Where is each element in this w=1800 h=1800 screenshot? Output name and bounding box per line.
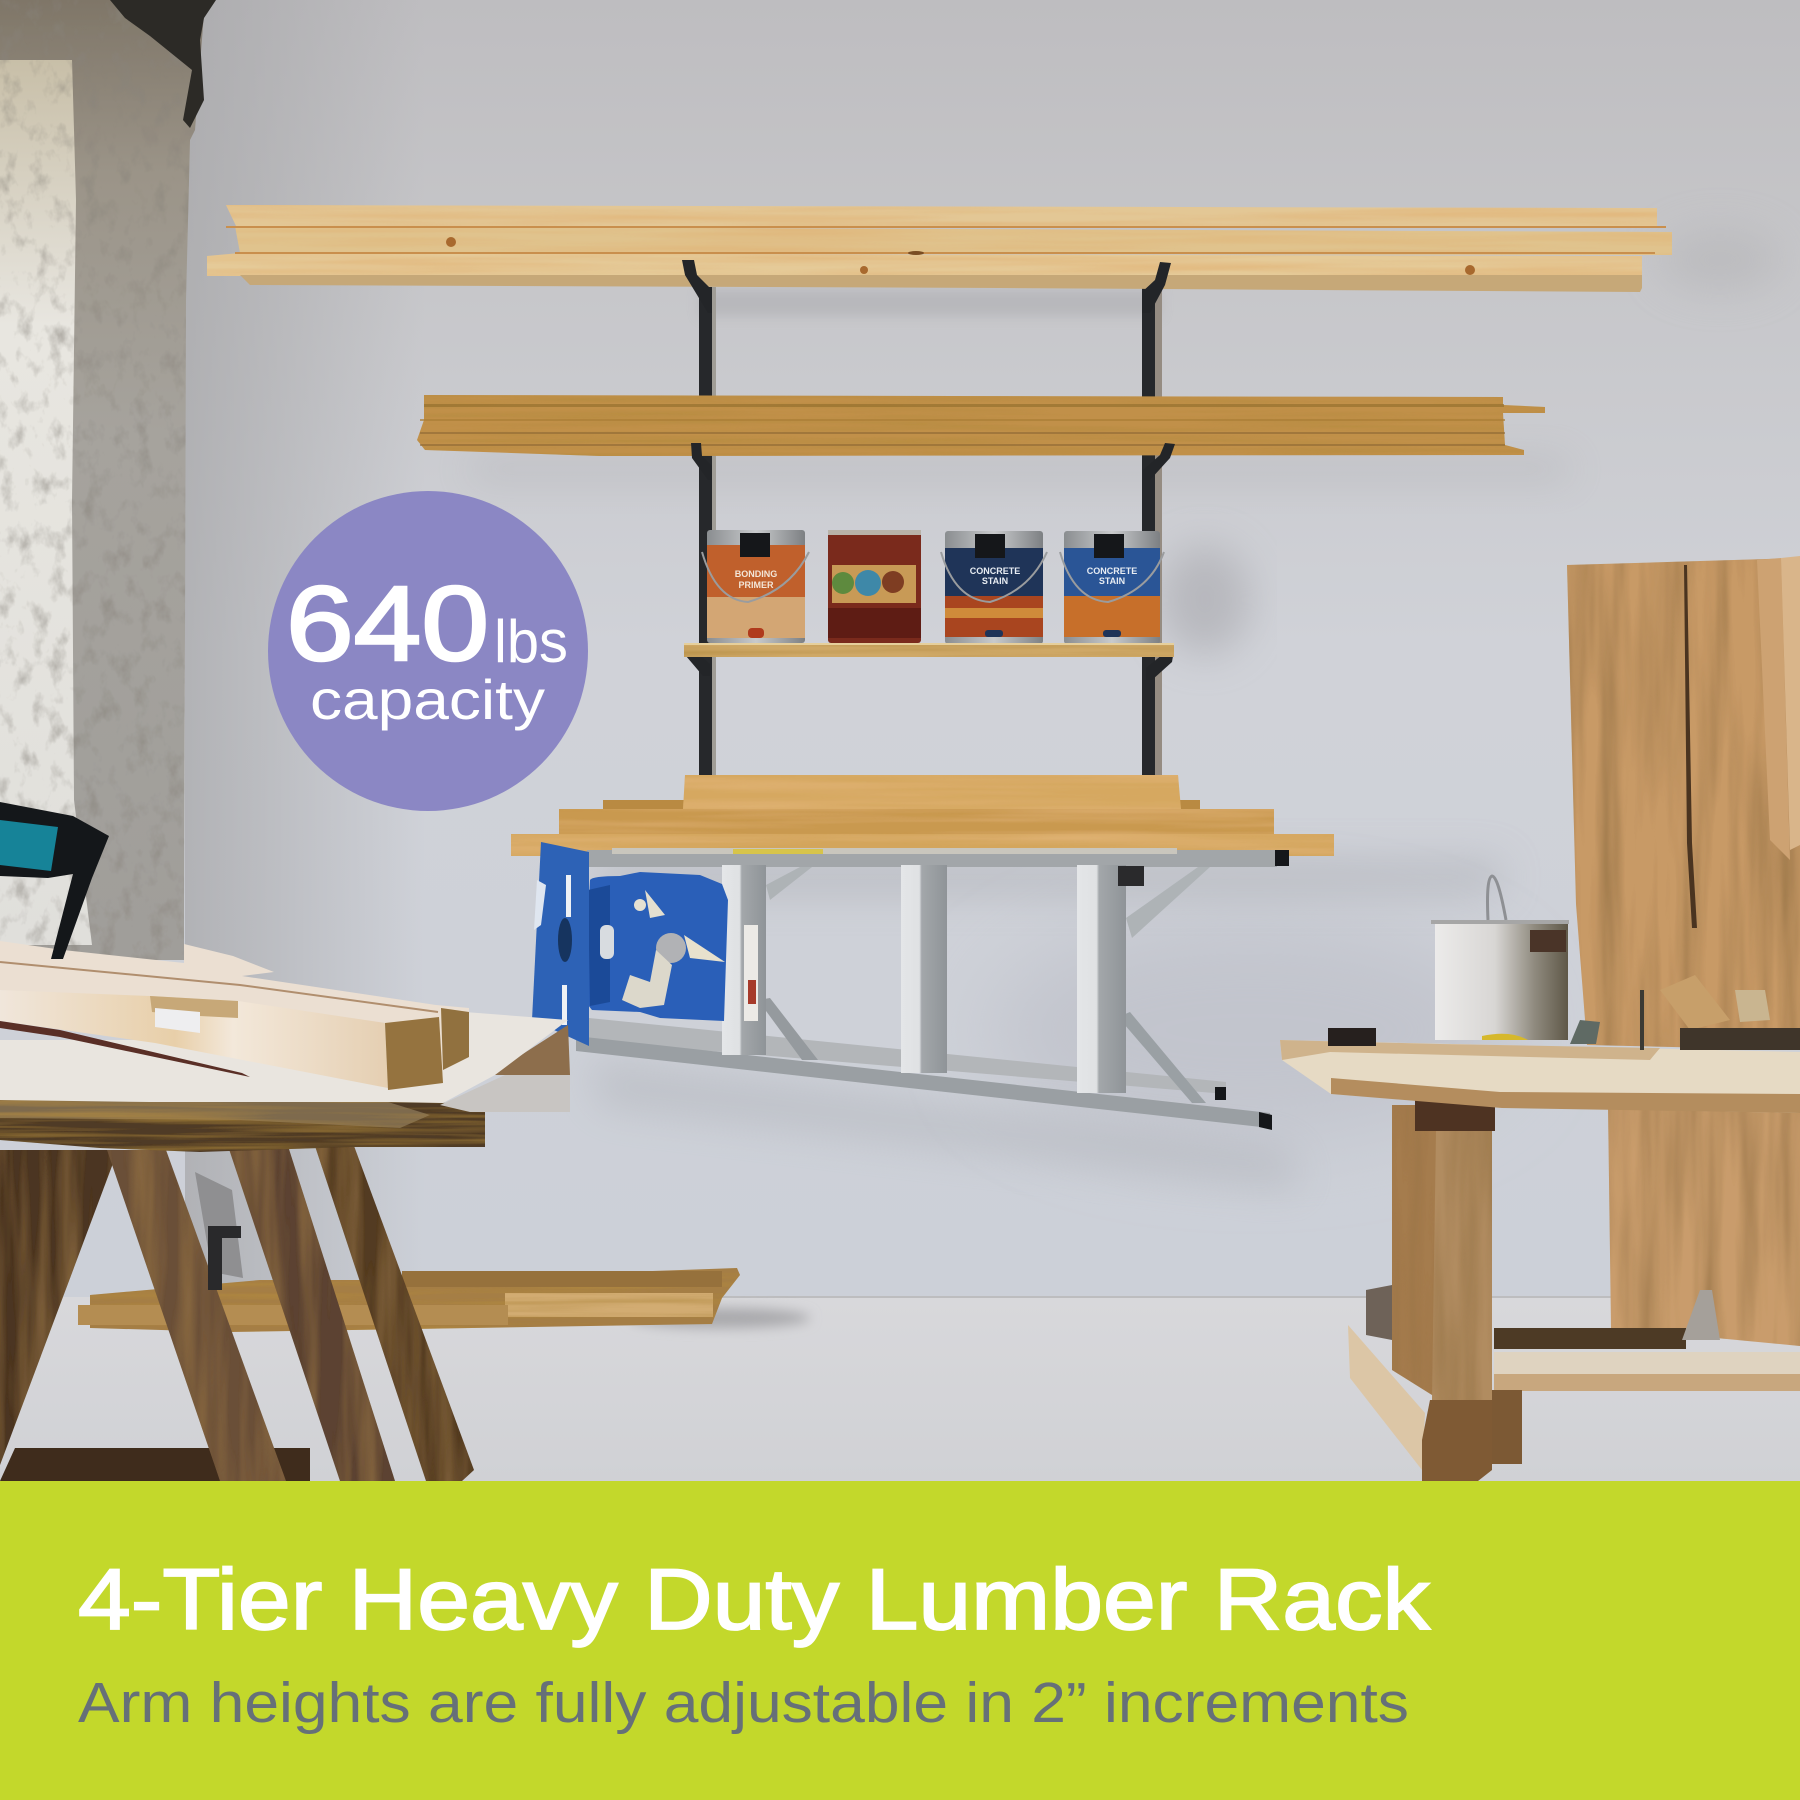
floor xyxy=(0,1296,1800,1481)
rack upright right xyxy=(1142,287,1162,775)
standing wood planks xyxy=(1567,556,1800,1346)
bottom tier lumber xyxy=(511,775,1334,856)
capacity unit: lbs xyxy=(494,608,568,675)
bench leg xyxy=(1392,1100,1495,1481)
capacity number: 640 xyxy=(286,565,489,683)
right workbench xyxy=(1280,975,1800,1481)
stone pillar xyxy=(0,0,216,960)
rack upright left xyxy=(699,287,716,775)
wall background xyxy=(0,0,1800,1300)
power tool handle xyxy=(0,802,109,959)
bench top xyxy=(1280,1040,1800,1113)
table edge xyxy=(0,1025,570,1152)
left workbench xyxy=(0,941,570,1481)
stepladder xyxy=(532,842,1289,1130)
sawhorse legs xyxy=(0,1146,474,1481)
paint can: bonding primer: PRIMER xyxy=(738,580,774,590)
title: 4-Tier Heavy Duty Lumber Rack xyxy=(78,1552,1431,1648)
lime caption band xyxy=(0,1481,1800,1800)
ladder paint tray xyxy=(584,872,728,1021)
paint can: concrete stain two: STAIN xyxy=(1099,576,1125,586)
paint can: concrete stain one xyxy=(941,531,1047,644)
paint can: concrete stain one: STAIN xyxy=(982,576,1008,586)
rack support arms xyxy=(682,260,1175,680)
base rails xyxy=(1348,1285,1800,1470)
plywood shelf xyxy=(684,643,1174,657)
paint can: wood stain xyxy=(828,530,921,643)
top tier lumber xyxy=(207,205,1672,292)
can label: BONDING xyxy=(735,569,777,579)
capacity label: capacity xyxy=(310,668,545,731)
can label: CONCRETE xyxy=(1087,566,1137,576)
metal bucket xyxy=(1431,876,1569,1040)
ladder top cap xyxy=(532,842,589,1046)
second tier lumber xyxy=(417,395,1545,456)
paint can: bonding primer xyxy=(702,530,809,643)
subtitle: Arm heights are fully adjustable in 2” increments xyxy=(78,1671,1409,1735)
paint can: concrete stain two xyxy=(1060,531,1164,644)
shadows of shelves on wall xyxy=(470,230,1780,1190)
capacity badge xyxy=(268,491,588,811)
table top surface xyxy=(0,1012,568,1103)
lumber on table xyxy=(0,941,469,1090)
can label: CONCRETE xyxy=(970,566,1020,576)
floor lumber pile xyxy=(78,1268,740,1332)
bench tools xyxy=(1328,975,1800,1050)
